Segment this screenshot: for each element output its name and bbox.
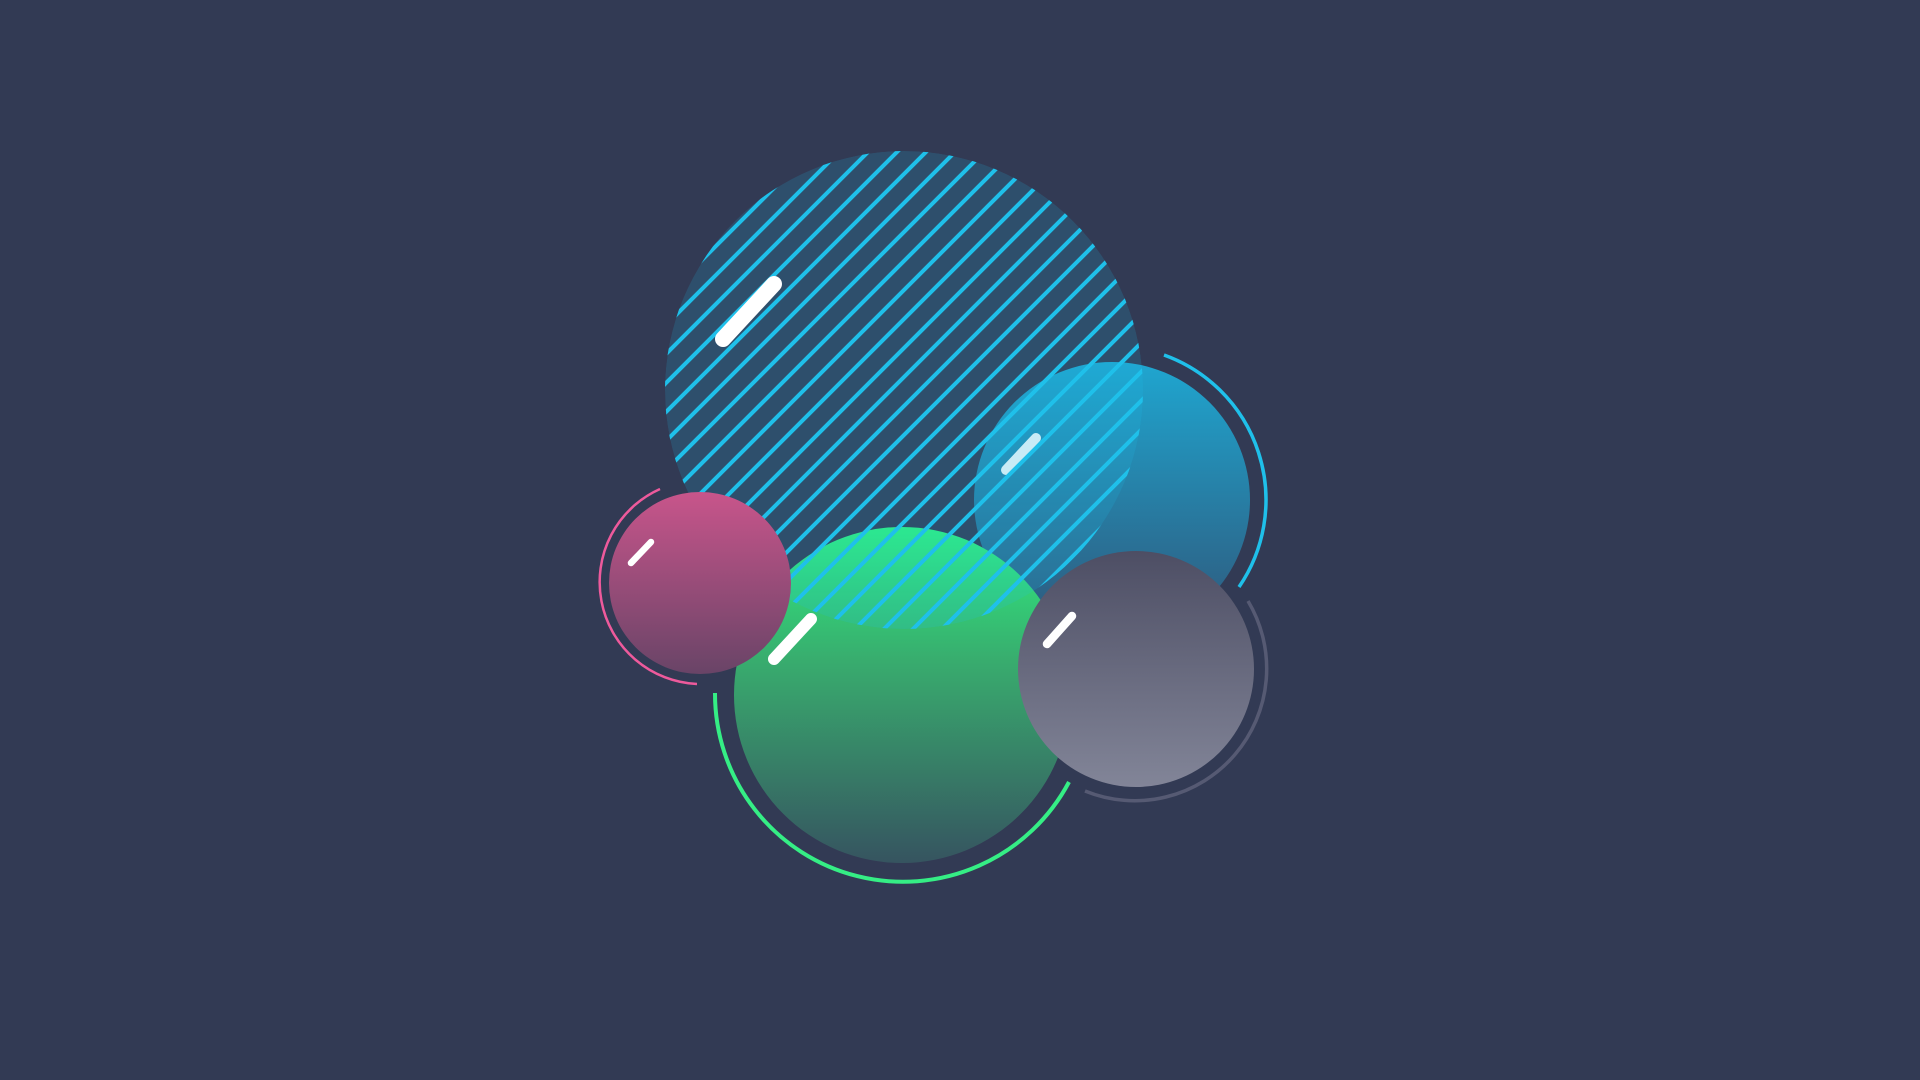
blue ring xyxy=(1164,355,1266,587)
pink circle xyxy=(609,492,791,674)
blue circle xyxy=(974,362,1250,638)
grey circle xyxy=(1018,551,1254,787)
big circle highlight xyxy=(723,284,774,339)
circles illustration xyxy=(598,151,1268,884)
grey ring xyxy=(1085,601,1267,801)
green circle xyxy=(734,527,1070,863)
green ring xyxy=(715,693,1069,882)
stripes xyxy=(665,151,1143,629)
striped circle xyxy=(665,151,1143,629)
grey highlight xyxy=(1047,616,1072,644)
pink highlight xyxy=(631,542,651,563)
green highlight xyxy=(774,619,811,659)
blue highlight xyxy=(1006,438,1036,470)
pink ring xyxy=(600,489,697,684)
